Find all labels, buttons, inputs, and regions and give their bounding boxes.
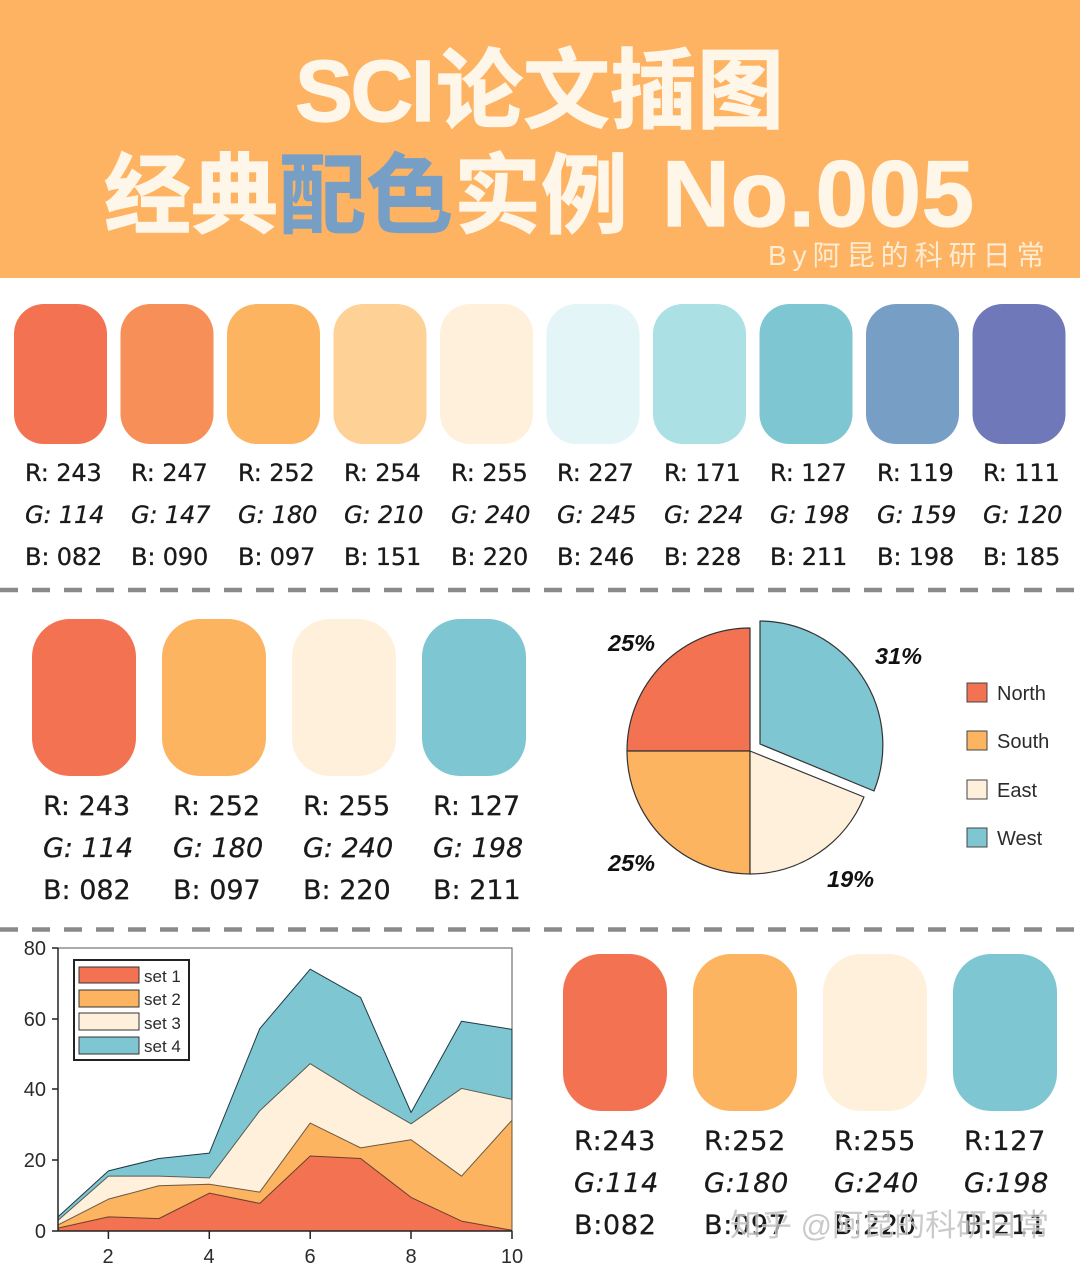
stacked area chart: 10 xyxy=(501,1246,523,1268)
swatch cream: G: 240 xyxy=(303,833,393,864)
header banner xyxy=(0,0,1080,278)
swatch 9: R: 119 xyxy=(877,459,954,487)
pie chart: 25% xyxy=(607,630,655,656)
swatch cream xyxy=(292,619,396,906)
swatch 2: G: 147 xyxy=(131,501,211,529)
swatch 1 xyxy=(14,304,107,571)
swatch red xyxy=(32,619,136,906)
swatch orange: R:252 xyxy=(704,1126,786,1157)
pie chart legend: South xyxy=(997,731,1049,753)
swatch 6 xyxy=(546,304,640,571)
swatch 8: G: 198 xyxy=(770,501,849,529)
stacked area chart: 20 xyxy=(24,1150,46,1172)
swatch 2: B: 090 xyxy=(131,543,208,571)
swatch cream: G:240 xyxy=(834,1168,919,1199)
swatch cream: R:255 xyxy=(834,1126,916,1157)
swatch teal: G:198 xyxy=(964,1168,1049,1199)
swatch teal: R: 127 xyxy=(433,791,520,822)
swatch 8: R: 127 xyxy=(770,459,847,487)
title line 1: 论文插图 xyxy=(436,43,784,140)
swatch teal: R:127 xyxy=(964,1126,1046,1157)
title line 2: 配色 xyxy=(279,148,453,245)
swatch 8 xyxy=(760,304,852,571)
area chart legend: set 1 xyxy=(144,967,181,986)
area chart legend xyxy=(74,960,189,1060)
swatch 9: B: 198 xyxy=(877,543,954,571)
swatch 3: R: 252 xyxy=(238,459,315,487)
stacked area chart: 4 xyxy=(203,1246,215,1268)
swatch 7: B: 228 xyxy=(664,543,741,571)
swatch 6: B: 246 xyxy=(557,543,634,571)
stacked area chart: 60 xyxy=(24,1009,46,1031)
area chart legend: set 2 xyxy=(144,990,181,1009)
author signature: By阿昆的科研日常 xyxy=(768,240,1051,271)
title line 2: 实例 xyxy=(454,148,628,245)
swatch 3: G: 180 xyxy=(238,501,317,529)
swatch 10: R: 111 xyxy=(983,459,1060,487)
swatch red: G: 114 xyxy=(43,833,133,864)
swatch 6: R: 227 xyxy=(557,459,634,487)
stacked area chart: 40 xyxy=(24,1079,46,1101)
swatch 6: G: 245 xyxy=(557,501,636,529)
title line 2: No.005 xyxy=(662,141,974,246)
swatch teal: B: 211 xyxy=(433,875,521,906)
panel: four colour palette for pie chart xyxy=(32,619,526,906)
swatch orange xyxy=(693,954,797,1241)
swatch cream: B: 220 xyxy=(303,875,391,906)
zhihu watermark: 知乎 @阿昆的科研日常 xyxy=(730,1208,1049,1243)
stacked area chart: 2 xyxy=(102,1246,114,1268)
stacked area chart xyxy=(24,938,523,1268)
swatch 2 xyxy=(120,304,214,571)
swatch 4: B: 151 xyxy=(344,543,421,571)
pie chart: 19% xyxy=(827,866,874,892)
area chart legend: set 4 xyxy=(144,1037,181,1056)
swatch 4: R: 254 xyxy=(344,459,421,487)
swatch 3: B: 097 xyxy=(238,543,315,571)
swatch 4 xyxy=(334,304,426,571)
swatch orange: R: 252 xyxy=(173,791,260,822)
swatch red: R: 243 xyxy=(43,791,130,822)
swatch 1: G: 114 xyxy=(25,501,104,529)
swatch orange: B: 097 xyxy=(173,875,261,906)
swatch 3 xyxy=(227,304,320,571)
swatch 10: G: 120 xyxy=(983,501,1062,529)
title line 1: SCI xyxy=(295,43,435,140)
swatch 7: G: 224 xyxy=(664,501,743,529)
swatch 4: G: 210 xyxy=(344,501,423,529)
stacked area chart: 80 xyxy=(24,938,46,960)
swatch teal xyxy=(422,619,526,906)
panel: four colour palette for area chart xyxy=(563,954,1057,1241)
pie chart: 25% xyxy=(607,850,655,876)
stacked area chart: 8 xyxy=(405,1246,417,1268)
plot frame xyxy=(58,948,512,1231)
swatch orange: G:180 xyxy=(704,1168,789,1199)
swatch 5: R: 255 xyxy=(451,459,528,487)
pie chart: 31% xyxy=(875,643,922,669)
swatch 1: B: 082 xyxy=(25,543,102,571)
swatch cream: B:220 xyxy=(834,1210,917,1241)
swatch orange: B:097 xyxy=(704,1210,787,1241)
swatch 9 xyxy=(866,304,959,571)
swatch red: B:082 xyxy=(574,1210,657,1241)
swatch teal xyxy=(953,954,1057,1241)
swatch 10 xyxy=(972,304,1066,571)
stacked area chart: 6 xyxy=(304,1246,316,1268)
swatch 8: B: 211 xyxy=(770,543,847,571)
swatch red: R:243 xyxy=(574,1126,656,1157)
swatch orange xyxy=(162,619,266,906)
swatch red: B: 082 xyxy=(43,875,131,906)
panel: ten colour palette xyxy=(14,304,1066,571)
swatch 5: G: 240 xyxy=(451,501,530,529)
pie chart legend: West xyxy=(997,828,1043,850)
swatch teal: G: 198 xyxy=(433,833,523,864)
swatch 7 xyxy=(653,304,746,571)
axes and ticks xyxy=(52,948,512,1239)
swatch 1: R: 243 xyxy=(25,459,102,487)
swatch 7: R: 171 xyxy=(664,459,741,487)
swatch 5 xyxy=(440,304,533,571)
pie chart xyxy=(607,621,922,892)
swatch orange: G: 180 xyxy=(173,833,263,864)
swatch 5: B: 220 xyxy=(451,543,528,571)
swatch cream: R: 255 xyxy=(303,791,390,822)
swatch red xyxy=(563,954,667,1241)
title line 2: 经典 xyxy=(104,148,278,245)
swatch 9: G: 159 xyxy=(877,501,956,529)
stacked area chart: 0 xyxy=(35,1221,46,1243)
pie chart legend: North xyxy=(997,683,1046,705)
swatch 10: B: 185 xyxy=(983,543,1060,571)
swatch 2: R: 247 xyxy=(131,459,208,487)
swatch teal: B:211 xyxy=(964,1210,1047,1241)
pie chart legend xyxy=(967,683,1049,850)
swatch cream xyxy=(823,954,927,1241)
area chart legend: set 3 xyxy=(144,1014,181,1033)
pie chart legend: East xyxy=(997,780,1037,802)
swatch red: G:114 xyxy=(574,1168,659,1199)
